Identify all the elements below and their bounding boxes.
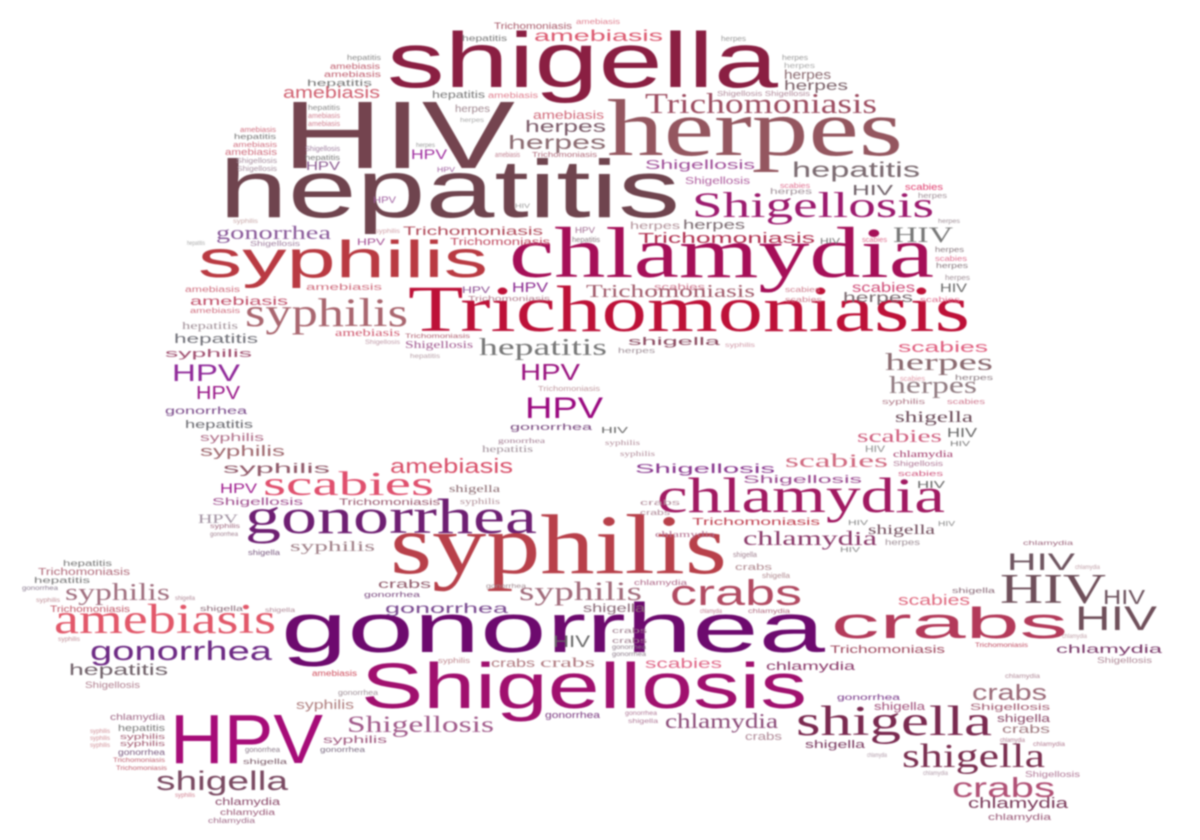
small words: forehead band: Trichomoniasis (450, 237, 550, 248)
small words: cranium left edge: hepatitis (305, 155, 341, 162)
small words: cranium left edge: HPV (373, 195, 396, 205)
small words: forehead band: scabies (920, 297, 961, 304)
small words: cranium left edge: amebiasis (225, 147, 278, 157)
right crossbone upper word cluster: scabies (898, 592, 970, 609)
lower bones word cluster: scabies (645, 655, 722, 671)
skull centre nose and teeth word cluster: Shigellosis (405, 339, 473, 351)
lower bones word cluster: chlamydia (988, 812, 1051, 822)
lower bones word cluster: shigella (805, 739, 866, 751)
skull right cheek and jaw word cluster: herpes (955, 375, 994, 382)
left crossbone word cluster: shigella (200, 606, 243, 613)
skull left cheek and jaw word cluster: HPV (172, 360, 240, 387)
skull right cheek and jaw word cluster: scabies (947, 399, 986, 406)
small words: cranium top: hepatitis (307, 78, 373, 88)
right crossbone upper word cluster: chlamydia (1075, 565, 1101, 571)
skull centre nose and teeth word cluster: shigella (628, 336, 722, 348)
lower bones word cluster: chlamydia (1005, 674, 1041, 680)
small words: cranium top: herpes (721, 36, 747, 43)
right crossbone upper word cluster: chlamydia (1023, 541, 1074, 547)
right crossbone upper word cluster: crabs (612, 628, 648, 635)
word: HIV: HIV (282, 82, 515, 189)
left crossbone word cluster: crabs (491, 656, 535, 670)
word: Shigellosis large: Shigellosis (361, 650, 807, 722)
word: crabs upper right: crabs (972, 680, 1047, 705)
small words: forehead band: HPV (575, 226, 596, 235)
lower bones word cluster: chlamydia (220, 808, 276, 817)
small words: cranium top: herpes (782, 55, 809, 62)
small words: forehead band: hepatitis (792, 159, 920, 182)
skull right cheek and jaw word cluster (390, 339, 994, 592)
word: shigella lower right: shigella (902, 738, 1045, 775)
word: shigella lower left: shigella (156, 766, 289, 796)
word: chlamydia lower: chlamydia (657, 467, 945, 523)
left crossbone word cluster: syphilis (58, 637, 80, 643)
small words: forehead band: herpes (770, 187, 812, 196)
small words: cranium left edge: gonorrhea (216, 223, 332, 244)
small words: cranium left edge: hepatitis (187, 241, 205, 247)
lower bones word cluster: chlamydia (923, 771, 949, 777)
right crossbone upper word cluster: chlamydia (1062, 634, 1088, 640)
skull left cheek and jaw word cluster (165, 320, 537, 557)
skull right cheek and jaw word cluster: Shigellosis (743, 474, 863, 486)
skull right cheek and jaw word cluster: Trichomoniasis (692, 517, 820, 528)
skull right cheek and jaw word cluster: scabies (900, 376, 926, 383)
small words: forehead band: scabies (862, 237, 888, 244)
lower bones word cluster: gonorrhea (625, 711, 658, 717)
small words: forehead band: HIV (820, 237, 841, 246)
small words: forehead band: scabies (852, 279, 915, 295)
lower bones word cluster: Trichomoniasis (116, 766, 167, 772)
skull left cheek and jaw word cluster: Trichomoniasis (339, 497, 441, 507)
lower bones word cluster: syphilis (175, 793, 195, 799)
small words: cranium top: amebiasis (576, 19, 621, 26)
skull right cheek and jaw word cluster: chlamydia (634, 580, 687, 587)
small words: cranium left edge: HPV (411, 146, 448, 162)
lower bones word cluster: chlamydia (1033, 742, 1066, 748)
word: gonorrhea serif: gonorrhea (245, 488, 537, 544)
right crossbone upper word cluster: Trichomoniasis (830, 644, 946, 656)
word: gonorrhea left: gonorrhea (90, 636, 273, 666)
word: crabs lower right: crabs (952, 772, 1055, 803)
lower bones word cluster: gonorrhea (837, 693, 901, 702)
lower bones word cluster: chlamydia (110, 712, 165, 722)
small words: forehead band: HIV (940, 281, 967, 295)
small words: cranium left edge: syphilis (233, 219, 258, 225)
skull right cheek and jaw word cluster: HIV (938, 521, 955, 528)
small words: forehead band: Shigellosis (685, 176, 750, 187)
skull right cheek and jaw word cluster: HIV (947, 425, 977, 440)
small words: cranium left edge: amebiasis (233, 142, 278, 149)
left crossbone word cluster: crabs (378, 577, 431, 591)
lower bones word cluster: shigella (628, 719, 659, 725)
small words: cranium left edge: herpes (416, 143, 435, 149)
small words: cranium top: amebiasis (534, 28, 663, 45)
skull right cheek and jaw word cluster: HIV (865, 444, 885, 454)
small words: cranium left edge: Shigellosis (250, 241, 301, 248)
word: syphilis large: syphilis (390, 498, 727, 592)
small words: cranium left edge: HPV (306, 159, 340, 173)
lower bones word cluster (90, 650, 1080, 825)
word: syphilis left: syphilis (65, 580, 170, 606)
word: HPV large: HPV (170, 700, 323, 778)
skull left cheek and jaw word cluster: gonorrhea (165, 406, 248, 417)
right crossbone upper word cluster: shigella (952, 588, 995, 595)
word: hepatitis centre: hepatitis (479, 335, 607, 361)
small words: forehead band: scabies (780, 183, 811, 190)
left crossbone word cluster: HIV (553, 632, 591, 651)
skull left cheek and jaw word cluster: syphilis (460, 497, 500, 506)
skull right cheek and jaw word cluster: herpes (885, 538, 920, 547)
small words: cranium top: amebiasis (283, 83, 380, 102)
small words: forehead band: amebiasis (190, 308, 241, 315)
lower bones word cluster: shigella (997, 713, 1051, 725)
skull left cheek and jaw word cluster: syphilis (210, 524, 240, 530)
word: Trichomoniasis large: Trichomoniasis (408, 273, 970, 346)
lower bones word cluster: Shigellosis (970, 702, 1051, 712)
skull right cheek and jaw word cluster: herpes (885, 350, 993, 376)
skull left cheek and jaw word cluster: hepatitis (174, 331, 259, 346)
skull centre nose and teeth word cluster: HIV (601, 426, 629, 435)
skull centre nose and teeth word cluster: Trichomoniasis (538, 386, 601, 393)
small words: cranium top: amebiasis (533, 108, 604, 122)
skull right cheek and jaw word cluster: scabies (857, 426, 942, 446)
word: chlamydia lower right: chlamydia (968, 795, 1069, 812)
lower bones word cluster: Shigellosis (1025, 770, 1080, 779)
lower bones word cluster: syphilis (90, 729, 110, 735)
left crossbone word cluster: hepatitis (34, 576, 90, 585)
skull right cheek and jaw word cluster: HIV (917, 480, 946, 491)
small words: forehead band: Trichomoniasis (403, 224, 543, 238)
skull right cheek and jaw word cluster: shigella (733, 552, 757, 559)
skull centre nose and teeth word cluster: amebiasis (335, 328, 400, 339)
small words: cranium top: hepatitis (308, 105, 341, 112)
small words: forehead band: herpes (938, 219, 960, 225)
left crossbone word cluster: shigella (265, 608, 296, 614)
word: HIV group: HIV (1007, 549, 1075, 576)
small words: cranium top: herpes (455, 104, 490, 115)
skull right cheek and jaw word cluster: chlamydia (655, 530, 716, 539)
skull right cheek and jaw word cluster: HIV (848, 520, 869, 527)
lower bones word cluster: chlamydia (867, 753, 887, 759)
small words: forehead band: amebiasis (185, 285, 240, 294)
skull right cheek and jaw word cluster: shigella (895, 409, 973, 426)
skull right cheek and jaw word cluster: shigella (762, 573, 790, 580)
word: HIV group (1000, 549, 1157, 638)
left crossbone word cluster: syphilis (438, 658, 471, 665)
skull left cheek and jaw word cluster: hepatitis (185, 419, 254, 431)
lower bones word cluster: chlamydia (215, 797, 281, 808)
small words: forehead band: herpes (843, 289, 913, 305)
word: Shigellosis lower serif: Shigellosis (347, 712, 494, 737)
small words: cranium left edge: Shigellosis (237, 166, 278, 173)
skull right cheek and jaw word cluster: Shigellosis (635, 461, 776, 476)
left crossbone word cluster: syphilis (296, 697, 355, 712)
small words: forehead band: hepatitis (572, 237, 601, 244)
small words: forehead band: herpes (630, 221, 680, 232)
lower bones word cluster: shigella (874, 701, 926, 713)
right crossbone upper word cluster: Shigellosis (1097, 656, 1152, 665)
skull right cheek and jaw word cluster: scabies (898, 339, 988, 356)
lower bones word cluster: chlamydia (1000, 738, 1026, 744)
skull left cheek and jaw word cluster: shigella (248, 550, 280, 557)
skull right cheek and jaw word cluster: syphilis (882, 399, 926, 406)
lower bones word cluster: gonorrhea (320, 747, 365, 754)
small words: cranium top: herpes (460, 118, 484, 124)
small words: forehead band: Shigellosis (645, 157, 756, 172)
small words: forehead band: scabies (785, 297, 823, 304)
left crossbone word cluster: crabs (540, 656, 595, 671)
skull centre nose and teeth word cluster: gonorrhea (498, 437, 546, 445)
right crossbone upper word cluster: crabs (612, 638, 648, 645)
lower bones word cluster: syphilis (323, 735, 387, 746)
skull centre nose and teeth word cluster: gonorrhea (510, 422, 592, 432)
skull right cheek and jaw word cluster: chlamydia (893, 449, 953, 459)
skull right cheek and jaw word cluster: HIV (840, 547, 861, 554)
small words: cranium top: amebiasis (488, 91, 538, 100)
lower bones word cluster: hepatitis (118, 723, 166, 733)
left crossbone word cluster: syphilis (36, 598, 60, 604)
small words: forehead band: Trichomoniasis (638, 230, 815, 247)
small words: forehead band: herpes (935, 247, 965, 254)
skull right cheek and jaw word cluster: shigella (868, 523, 936, 538)
word: crabs large: crabs (831, 599, 1068, 648)
right crossbone upper word cluster: gonorrhea (612, 645, 647, 651)
small words: forehead band: HIV (852, 182, 893, 199)
skull centre nose and teeth word cluster: Shigellosis (365, 340, 400, 346)
skull right cheek and jaw word cluster: HIV (950, 441, 971, 448)
word: HPV centre small: HPV (520, 359, 581, 385)
skull right cheek and jaw word cluster: crabs (640, 510, 671, 517)
lower bones word cluster: syphilis (120, 734, 166, 741)
lower bones word cluster: chlamydia (208, 818, 255, 825)
left crossbone word cluster (22, 559, 825, 712)
skull left cheek and jaw word cluster: syphilis (200, 443, 285, 460)
skull right cheek and jaw word cluster: herpes (889, 373, 977, 399)
skull centre nose and teeth word cluster: herpes (618, 348, 656, 355)
small words: cranium left edge (187, 127, 598, 248)
small words: cranium left edge: Shigellosis (305, 146, 341, 153)
small words: forehead band: HPV (512, 279, 549, 295)
small words: cranium top: herpes (525, 117, 606, 136)
small words: cranium top: herpes (784, 63, 816, 70)
small words: cranium top: amebiasis (308, 113, 341, 120)
small words: cranium top: amebiasis (308, 121, 341, 128)
small words: cranium left edge: Trichomoniasis (532, 152, 598, 159)
small words: forehead band: herpes (918, 193, 948, 200)
word: HIV group: HIV (1103, 587, 1146, 609)
word: syphilis: syphilis (198, 231, 488, 289)
small words: cranium top: herpes (508, 133, 606, 154)
word: crabs upper: crabs (670, 572, 802, 613)
skull right cheek and jaw word cluster: Shigellosis (893, 461, 944, 468)
small words: forehead band: Trichomoniasis (586, 281, 755, 301)
small words: cranium top (283, 19, 848, 154)
small words: forehead band (185, 157, 971, 315)
skull left cheek and jaw word cluster: Shigellosis (212, 497, 303, 508)
small words: forehead band: scabies (905, 182, 944, 192)
small words: forehead band: HIV (893, 222, 953, 247)
word: Shigellosis serif: Shigellosis (692, 185, 934, 225)
left crossbone word cluster: Trichomoniasis (38, 567, 130, 578)
left crossbone word cluster: amebiasis (312, 669, 357, 678)
skull right cheek and jaw word cluster: crabs (735, 562, 773, 572)
skull centre nose and teeth word cluster: syphilis (620, 450, 655, 458)
small words: forehead band: herpes (683, 217, 746, 232)
left crossbone word cluster: shigella (583, 601, 645, 615)
word: scabies: scabies (263, 466, 434, 503)
skull left cheek and jaw word cluster: syphilis (165, 348, 253, 360)
skull left cheek and jaw word cluster: HPV (220, 480, 258, 496)
skull left cheek and jaw word cluster: syphilis (223, 460, 330, 476)
right crossbone upper word cluster: gonorrhea (612, 652, 647, 658)
lower bones word cluster: crabs (745, 731, 783, 743)
word: chlamydia centre: chlamydia (665, 709, 779, 733)
small words: cranium top: amebiasis (324, 70, 381, 79)
lower bones word cluster: shigella (243, 759, 287, 766)
small words: cranium left edge: Shigellosis (236, 158, 278, 165)
small words: forehead band: herpes (936, 263, 969, 270)
left crossbone word cluster: Shigellosis (85, 680, 141, 690)
small words: cranium top: hepatitis (347, 55, 382, 62)
small words: forehead band: amebiasis (306, 282, 383, 292)
word: chlamydia: chlamydia (509, 213, 934, 293)
lower bones word cluster: Trichomoniasis (113, 758, 165, 764)
left crossbone word cluster: shigella (175, 596, 196, 602)
lower bones word cluster: syphilis (120, 741, 166, 748)
right crossbone upper word cluster: chlamydia (748, 609, 791, 615)
small words: cranium top: hepatitis (462, 34, 507, 43)
small words: forehead band: Trichomoniasis (468, 296, 551, 303)
small words: forehead band: scabies (785, 287, 821, 294)
skull centre nose and teeth word cluster: hepatitis (482, 444, 534, 454)
skull right cheek and jaw word cluster: scabies (898, 471, 944, 478)
skull right cheek and jaw word cluster: crabs (640, 500, 681, 507)
skull right cheek and jaw word cluster: chlamydia (743, 528, 877, 550)
word: syphilis serif: syphilis (245, 290, 408, 335)
small words: cranium left edge: hepatitis (234, 134, 277, 141)
small words: cranium left edge: HIV (515, 204, 530, 210)
small words: forehead band: scabies (935, 256, 968, 263)
word: hepatitis: hepatitis (219, 144, 680, 235)
skull centre nose and teeth word cluster (335, 328, 755, 458)
skull centre nose and teeth word cluster: syphilis (725, 343, 755, 349)
small words: cranium top: Shigellosis Shigellosis (717, 91, 811, 98)
left crossbone word cluster: gonorrhea (385, 600, 508, 616)
lower bones word cluster: chlamydia (766, 659, 856, 673)
skull left cheek and jaw word cluster: syphilis (200, 432, 265, 444)
skull centre nose and teeth word cluster: hepatitis (410, 354, 440, 360)
small words: forehead band: herpes (945, 275, 971, 282)
skull left cheek and jaw word cluster: shigella (449, 484, 501, 495)
left crossbone word cluster: Trichomoniasis (50, 604, 131, 614)
small words: cranium top: hepatitis (432, 90, 485, 101)
left crossbone word cluster: gonorrhea (22, 586, 59, 592)
left crossbone word cluster: syphilis (519, 577, 642, 606)
left crossbone word cluster: gonorrhea (486, 584, 527, 590)
left crossbone word cluster: hepatitis (63, 559, 112, 568)
word: gonorrhea large: gonorrhea (281, 589, 825, 667)
small words: forehead band: HPV (462, 285, 490, 295)
small words: cranium top: herpes (784, 77, 848, 93)
small words: forehead band: HPV (357, 237, 385, 247)
right crossbone upper word cluster: chlamydia (1056, 642, 1163, 656)
word: HIV group: HIV (1000, 567, 1106, 613)
lower bones word cluster: syphilis (90, 736, 110, 742)
word: amebiasis: amebiasis (390, 456, 513, 478)
small words: cranium top: Trichomoniasis (494, 21, 573, 31)
lower bones word cluster: gonorrhea (118, 748, 166, 757)
word: HPV centre large: HPV (525, 392, 603, 425)
lower bones word cluster: crabs (1002, 722, 1050, 736)
right crossbone upper word cluster (612, 541, 1163, 665)
skull left cheek and jaw word cluster: HPV (198, 511, 239, 526)
lower bones word cluster: gonorrhea (545, 710, 600, 720)
small words: cranium left edge: amebiasis (240, 127, 277, 134)
skull cranium word cluster (185, 16, 971, 346)
word: hepatitis left: hepatitis (69, 662, 168, 679)
word: HIV group: HIV (1075, 600, 1157, 638)
word: shigella: shigella (387, 16, 779, 104)
skull left cheek and jaw word cluster: hepatitis (182, 320, 238, 332)
small words: cranium top: amebiasis (330, 62, 380, 71)
small words: cranium left edge: amebiasis (495, 152, 520, 159)
small words: forehead band: amebiasis (190, 294, 288, 308)
small words: cranium top: herpes (784, 67, 832, 82)
word: amebiasis serif: amebiasis (54, 597, 276, 643)
skull centre nose and teeth word cluster: Trichomoniasis (405, 334, 470, 340)
word: herpes: herpes (607, 85, 903, 173)
small words: forehead band: scabies (654, 282, 706, 292)
skull right cheek and jaw word cluster: scabies (785, 451, 888, 472)
word: shigella lower right large: shigella (796, 699, 993, 745)
lower bones word cluster: syphilis (90, 743, 110, 749)
word: Trichomoniasis small: Trichomoniasis (645, 89, 877, 120)
skull left cheek and jaw word cluster: syphilis (290, 539, 375, 555)
skull centre nose and teeth word cluster: syphilis (605, 439, 640, 447)
right crossbone upper word cluster: Trichomoniasis (975, 643, 1028, 649)
small words: cranium left edge: syphilis (375, 229, 400, 235)
right crossbone upper word cluster: chlamydia (700, 609, 723, 615)
left crossbone word cluster: gonorrhea (338, 690, 378, 697)
left crossbone word cluster: gonorrhea (364, 592, 420, 599)
small words: cranium left edge: HPV (437, 167, 455, 174)
skull left cheek and jaw word cluster: gonorrhea (210, 532, 239, 538)
lower bones word cluster: gonorrhea (245, 747, 280, 754)
skull left cheek and jaw word cluster: HPV (196, 383, 240, 403)
